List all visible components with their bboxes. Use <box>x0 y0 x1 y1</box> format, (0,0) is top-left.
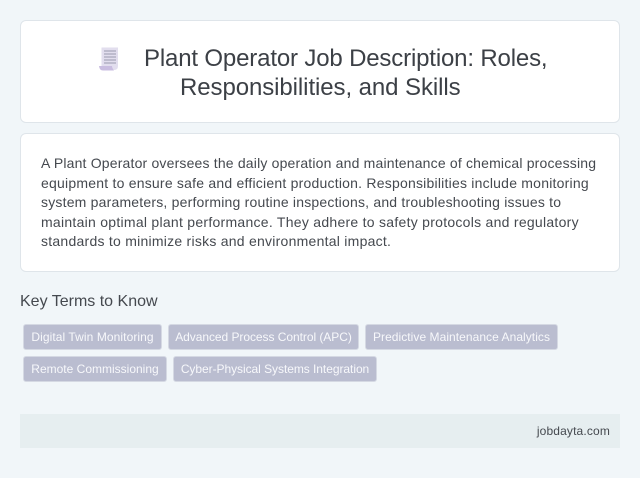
text block: description: maintain optimal plant performance. They adhere to safety protocols and regulatory <box>41 214 579 230</box>
text block: description: equipment to ensure safe and efficient production. Responsibilities include monitoring <box>41 174 589 190</box>
panel: title card <box>20 20 620 123</box>
tag: cyber-physical <box>173 356 377 382</box>
panel: description card <box>20 133 620 272</box>
title: Responsibilities, and Skills <box>180 74 461 101</box>
title: Plant Operator Job Description: Roles, <box>144 45 547 72</box>
tag list <box>23 324 558 382</box>
tag: APC: Advanced Process Control (APC) <box>175 330 352 344</box>
tag: predictive maintenance: Predictive Maintenance Analytics <box>373 330 550 344</box>
tag: cyber-physical: Cyber-Physical Systems Integration <box>181 362 369 376</box>
tag: remote commissioning: Remote Commissioning <box>31 362 159 376</box>
icon: document scroll <box>99 48 118 70</box>
text block: description: standards to minimize risks and environmental impact. <box>41 233 391 249</box>
footer text: jobdayta.com <box>537 424 610 438</box>
tag: digital twin: Digital Twin Monitoring <box>31 330 154 344</box>
text block: description: A Plant Operator oversees the daily operation and maintenance of chemical processing <box>41 155 596 171</box>
tag: APC <box>168 324 359 350</box>
heading: key terms: Key Terms to Know <box>20 293 158 310</box>
tag: predictive maintenance <box>365 324 558 350</box>
footer bar <box>20 414 620 448</box>
title <box>144 45 547 101</box>
tag: remote commissioning <box>23 356 167 382</box>
text block: description: system parameters, performing routine inspections, and troubleshooting issues to <box>41 194 561 210</box>
text block: description <box>41 155 596 249</box>
tag: digital twin <box>23 324 162 350</box>
